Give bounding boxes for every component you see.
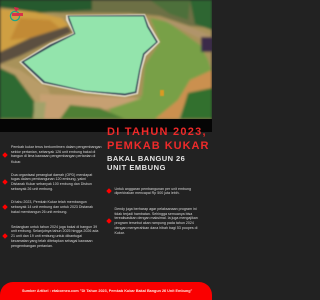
text block: 2023: bakal membangun 26 unit embung. [11,210,67,214]
text block: 2023 [2,200,93,214]
text block: OPD: Dua organisasi perangkat daerah (OPD) mendapat [11,173,92,177]
text block: program: Dendy juga berharap agar pelaksanaan program ini [114,207,197,211]
text block: 2023: sebanyak 14 unit embung dan untuk 2023 Distanak [11,205,93,209]
text block: 2024: pengembangan pertanian. [11,244,53,248]
photo: aerial view of reservoir [0,0,212,119]
title: PEMKAB KUKAR [107,140,209,152]
title [107,126,209,172]
text block: 2024: unit embung. Selanjutnya tahun 2025 hingga 2026 ada [11,229,98,233]
footer source bar [0,282,212,300]
logo [10,7,23,22]
text block: budget: Untuk anggaran pembangunan per unit embung [114,187,191,191]
text block: OPD: tugas dalam pembangunan 120 embung, yakni [11,177,86,181]
title: UNIT EMBUNG [107,162,166,172]
text block: 2024 [2,225,98,248]
text block: program: dengan menyerahkan dana hibah bagi 53 poopes di [114,226,197,230]
title: BAKAL BANGUN 26 [107,154,185,162]
text block: OPD: sebanyak 26 unit embung. [11,187,53,191]
text block: 2024: 21 unit dan 19 unit embung untuk dibantugai [11,234,82,238]
text block: commitment: sektor pertanian, sebanyak 126 unit embung bakal di [11,150,95,154]
text block: OPD [2,173,92,191]
text block: budget: diperkirakan mencapai Rp 500 juta lebih. [114,191,180,195]
text block: program: terealisasikan dengan maksimal. Ia juga mengajikan [114,216,198,220]
text block: 2024: kecamatan yang telah ditetapkan sebagai kawasan [11,239,93,243]
text block: program: program tersebut akan rampung pada tahun 2024 [114,221,194,225]
text block: program [106,207,198,235]
text block: program: Kukar. [114,231,125,235]
text block: commitment: Kukar. [11,160,21,164]
text block: budget [106,187,191,195]
text block: program: tidak terjadi hambatan. Sehingga semuanya bisa [114,212,192,216]
text block: commitment: Pemkab kukar terus berkomitmen dalam pengembangan [11,145,102,149]
text block: commitment: bangun di lima kawasan pengembangan pertanian di [11,154,95,158]
text block: 2023: Di tahu 2023, Pemkab Kukar telah membangun [11,200,87,204]
text block: OPD: Distanak Kukar sebanyak 100 embung dan Disbun [11,182,92,186]
text block: 2024: Sedangkan untuk tahun 2024 juga bakal di bangun 39 [11,225,97,229]
text block: commitment [2,145,102,164]
footer source bar: Sumber Artikel : etaborneo.com "Di Tahun 2023, Pemkab Kukar Bakal Bangun 26 Unit Embung" [22,289,192,293]
black band [0,119,212,132]
title: DI TAHUN 2023, [107,126,207,138]
